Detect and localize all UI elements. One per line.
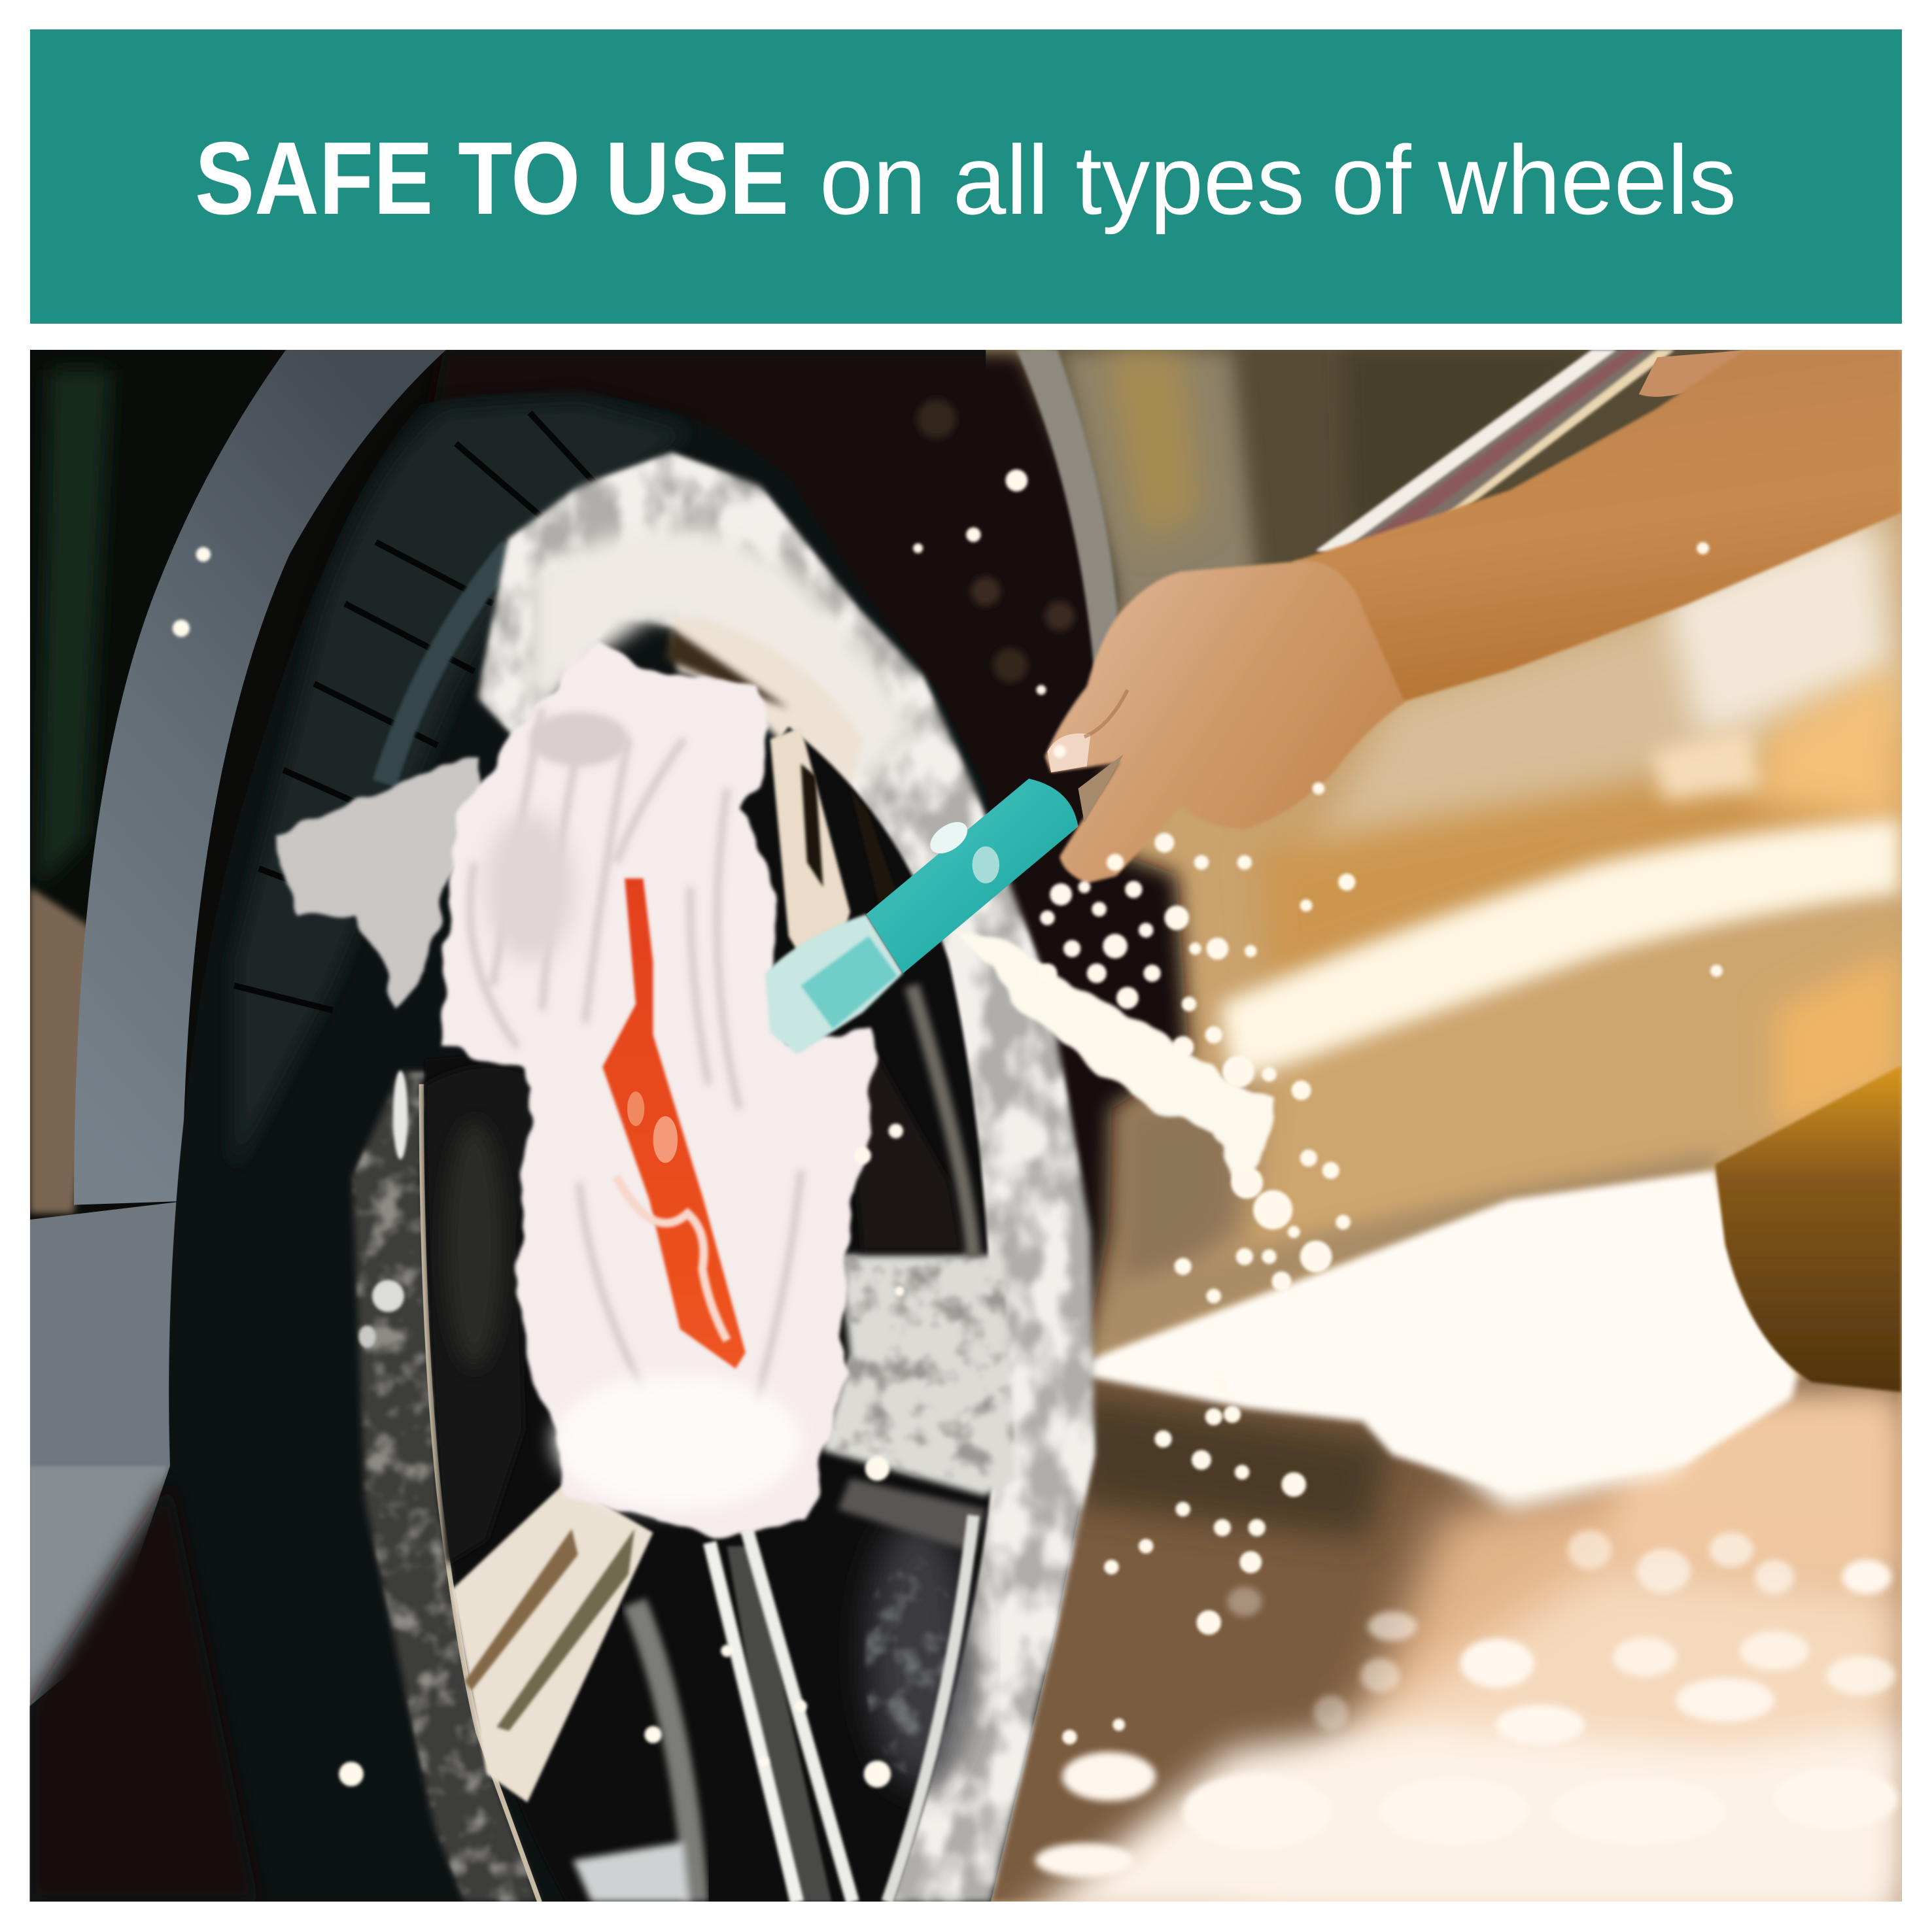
grey lower bumper xyxy=(29,1201,185,1706)
dark wheel recess with foam xyxy=(866,1515,970,1786)
bokeh highlights on wet ground xyxy=(1035,1530,1897,1877)
white microfibre mop head xyxy=(440,642,872,1537)
car body and wheel arch xyxy=(29,350,1189,1355)
alloy rim interior with spokes xyxy=(425,628,1016,1902)
grey wheel-arch fender xyxy=(74,350,446,1205)
blurred rear tyre xyxy=(1716,1066,1901,1392)
black tyre xyxy=(29,393,1090,1902)
fingers behind pole xyxy=(1639,350,1750,397)
foam smear on tyre xyxy=(273,751,487,1004)
subtitle: on all types of wheels: on all types of wheels xyxy=(819,125,1736,235)
cream chrome spoke, lower left xyxy=(452,1482,653,1802)
chrome telescopic pole xyxy=(1316,350,1674,560)
foam on tyre sidewall and rim lip xyxy=(353,453,1094,1902)
child's arm xyxy=(1292,350,1901,705)
title: safe to use: SAFE TO USE xyxy=(195,121,789,236)
bright sunlit patch on ground xyxy=(1080,1171,1798,1492)
driveway surface xyxy=(986,1355,1901,1902)
header banner xyxy=(30,29,1902,324)
water splash xyxy=(173,470,1723,1788)
blurred car and driveway background xyxy=(986,333,1910,1922)
white foam strips, lower spokes xyxy=(727,1546,832,1902)
inner spokes at top of rim xyxy=(770,727,850,998)
white foam spoke, right xyxy=(822,1256,1016,1495)
red scraper blade xyxy=(602,878,746,1369)
hand gripping the handle xyxy=(1045,560,1405,883)
teal brush handle xyxy=(765,779,1078,1055)
